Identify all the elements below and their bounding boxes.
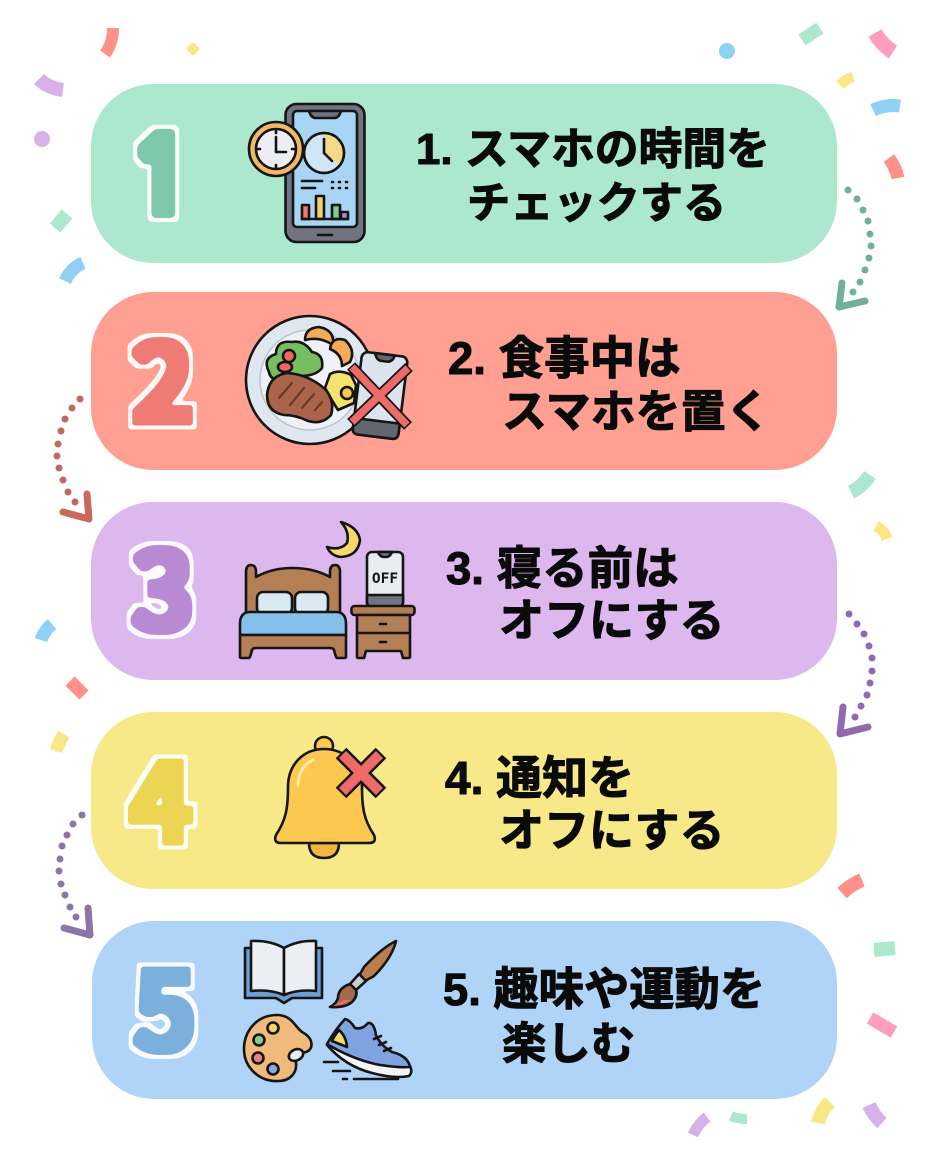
icon: plate and crossed phone xyxy=(246,316,409,444)
panel: step 1 xyxy=(91,84,837,263)
number 4: 4 xyxy=(129,718,193,874)
number 3: 3 xyxy=(131,506,195,662)
icon: book, brush, palette and shoe xyxy=(244,941,411,1081)
panel: step 4 xyxy=(91,712,837,889)
number 5: 5 xyxy=(133,926,197,1082)
step 3 text: 3. 寝る前は xyxy=(446,543,679,594)
arrow: step 4 to step 5 xyxy=(56,812,90,935)
icon: muted bell xyxy=(275,737,381,858)
step 4 text: 4. 通知を xyxy=(445,752,634,804)
panel: step 5 xyxy=(92,921,837,1099)
number 2: 2 xyxy=(131,298,195,454)
step 4 text xyxy=(445,752,724,856)
icon: bed with moon and phone off: OFF xyxy=(372,571,398,587)
panel: step 2 xyxy=(91,292,837,470)
step 5 text xyxy=(443,964,765,1069)
step 1 text: チェックする xyxy=(467,180,726,228)
arrow: step 2 to step 3 xyxy=(54,396,89,519)
icon: phone with clock xyxy=(249,104,364,242)
step 1 text xyxy=(416,125,770,228)
step 5 text: 楽しむ xyxy=(502,1020,635,1069)
step 3 text xyxy=(446,543,724,646)
step 2 text: スマホを置く xyxy=(502,386,771,437)
panel: step 3 xyxy=(91,502,837,680)
arrow: step 1 to step 2 xyxy=(839,186,874,307)
number 1: 1 xyxy=(131,127,191,226)
step 2 text: 2. 食事中は xyxy=(448,333,681,384)
step 2 text xyxy=(448,333,771,437)
arrow: step 3 to step 4 xyxy=(840,610,876,734)
icon: bed with moon and phone off xyxy=(240,522,414,658)
step 4 text: オフにする xyxy=(499,805,724,856)
step 3 text: オフにする xyxy=(499,595,724,646)
step 5 text: 5. 趣味や運動を xyxy=(443,964,765,1015)
step 1 text: 1. スマホの時間を xyxy=(416,125,770,174)
